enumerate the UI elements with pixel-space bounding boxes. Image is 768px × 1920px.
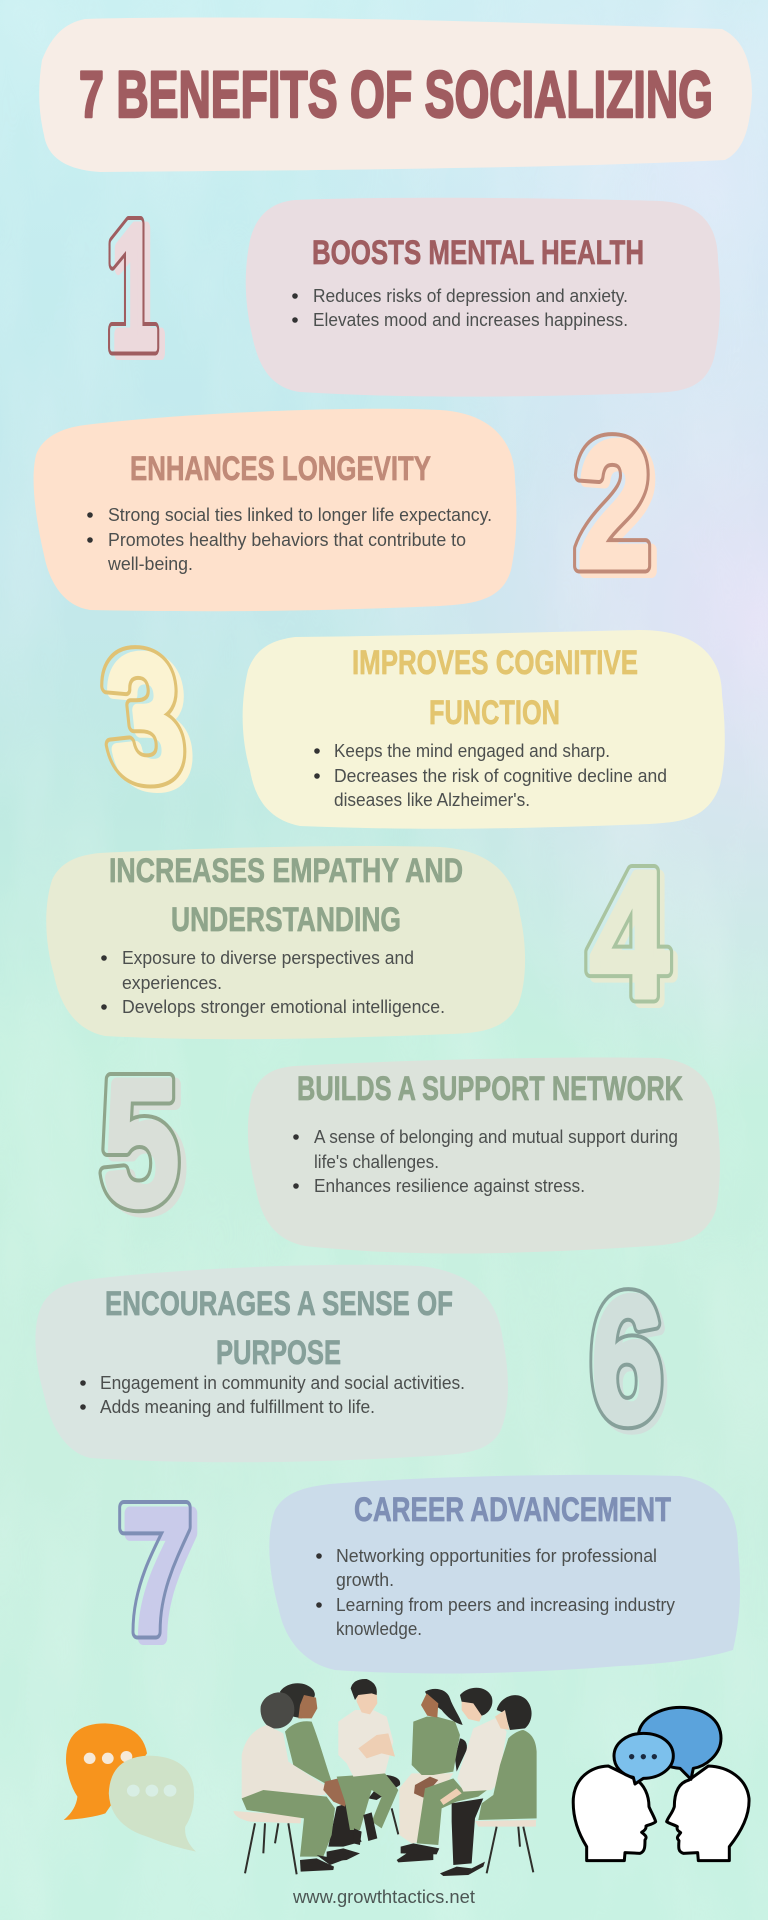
number 7: 7 bbox=[124, 1475, 198, 1677]
number 1 bbox=[108, 216, 165, 360]
title banner bbox=[39, 17, 752, 172]
number 5: 5 bbox=[106, 1046, 185, 1248]
heading bbox=[105, 1285, 453, 1372]
panel bbox=[243, 630, 725, 829]
left head bbox=[573, 1766, 656, 1861]
number 5 bbox=[98, 1072, 186, 1218]
bullets: Learning from peers and increasing industry bbox=[336, 1594, 676, 1615]
benefit 3 bbox=[243, 630, 725, 829]
panel bbox=[46, 846, 525, 1039]
bullets: well-being. bbox=[107, 553, 193, 574]
number 3 bbox=[100, 645, 192, 793]
panel bbox=[248, 1057, 720, 1254]
panel bbox=[246, 198, 720, 397]
bullets: A sense of belonging and mutual support during bbox=[314, 1126, 678, 1147]
bullets bbox=[292, 285, 628, 330]
bullets: growth. bbox=[336, 1569, 394, 1590]
large blue bubble bbox=[638, 1707, 721, 1779]
panel bbox=[34, 409, 516, 611]
bullets: Exposure to diverse perspectives and bbox=[122, 947, 414, 968]
number 7 bbox=[118, 1500, 198, 1645]
bullets bbox=[87, 504, 492, 574]
benefit 2 bbox=[34, 409, 516, 611]
bullets: life's challenges. bbox=[314, 1151, 439, 1172]
person: center man bbox=[337, 1679, 398, 1845]
bullets: Engagement in community and social activities. bbox=[100, 1372, 465, 1393]
panel bbox=[269, 1475, 740, 1673]
heading bbox=[109, 852, 463, 939]
benefit 5 bbox=[248, 1057, 720, 1254]
icon: speech bubbles orange and green bbox=[64, 1723, 196, 1852]
left chair bbox=[233, 1811, 302, 1874]
number 2: 2 bbox=[580, 408, 657, 610]
heading bbox=[352, 644, 638, 732]
benefit 6 bbox=[35, 1265, 508, 1462]
number 6: 6 bbox=[594, 1263, 667, 1465]
person: beige shirt left bbox=[242, 1692, 348, 1872]
icon: two heads with speech bubbles bbox=[573, 1707, 749, 1861]
heading: IMPROVES COGNITIVE bbox=[352, 644, 638, 682]
small blue bubble with dots bbox=[614, 1733, 673, 1784]
right head bbox=[667, 1766, 749, 1861]
bullets: Elevates mood and increases happiness. bbox=[313, 309, 628, 330]
person: green shirt left bbox=[280, 1683, 362, 1862]
bullets: Networking opportunities for professional bbox=[336, 1545, 657, 1566]
illustration: group of people sitting in a circle bbox=[233, 1679, 537, 1876]
bullets: Reduces risks of depression and anxiety. bbox=[313, 285, 628, 306]
orange bubble bbox=[64, 1723, 147, 1820]
bullets: Develops stronger emotional intelligence. bbox=[122, 996, 445, 1017]
title panel bbox=[39, 17, 752, 172]
heading: PURPOSE bbox=[216, 1334, 341, 1372]
center and back chairs bbox=[368, 1738, 467, 1834]
number 6 bbox=[589, 1287, 668, 1435]
heading: UNDERSTANDING bbox=[171, 901, 401, 939]
bullets bbox=[314, 740, 667, 810]
benefit 1 bbox=[246, 198, 720, 397]
bullets bbox=[101, 947, 445, 1017]
bullets bbox=[293, 1126, 678, 1196]
number 4: 4 bbox=[593, 838, 673, 1040]
bullets bbox=[316, 1545, 676, 1639]
person: woman in green right of center bbox=[399, 1689, 463, 1854]
person: woman in green jacket far right bbox=[440, 1695, 537, 1876]
benefit 4 bbox=[46, 846, 525, 1039]
heading: CAREER ADVANCEMENT bbox=[354, 1491, 671, 1529]
number 4 bbox=[584, 864, 678, 1008]
bullets: Strong social ties linked to longer life expectancy. bbox=[108, 504, 492, 525]
bullets: knowledge. bbox=[336, 1618, 422, 1639]
number 2 bbox=[573, 432, 657, 578]
bullets: Keeps the mind engaged and sharp. bbox=[334, 740, 610, 761]
panel bbox=[35, 1265, 508, 1462]
number 1: 1 bbox=[112, 190, 164, 392]
heading: BOOSTS MENTAL HEALTH bbox=[312, 234, 644, 272]
bullets bbox=[80, 1372, 465, 1417]
website url: www.growthtactics.net bbox=[292, 1887, 475, 1907]
number 3: 3 bbox=[100, 621, 199, 823]
benefit 7 bbox=[269, 1475, 740, 1673]
bullets: experiences. bbox=[122, 972, 222, 993]
bullets: Adds meaning and fulfillment to life. bbox=[100, 1396, 375, 1417]
green bubble bbox=[109, 1756, 196, 1852]
bullets: diseases like Alzheimer's. bbox=[334, 789, 530, 810]
heading: FUNCTION bbox=[429, 694, 560, 732]
heading: ENCOURAGES A SENSE OF bbox=[105, 1285, 453, 1323]
heading: INCREASES EMPATHY AND bbox=[109, 852, 463, 890]
right chair bbox=[475, 1820, 536, 1873]
heading: ENHANCES LONGEVITY bbox=[130, 450, 431, 488]
bullets: Enhances resilience against stress. bbox=[314, 1175, 585, 1196]
bullets: Promotes healthy behaviors that contribute to bbox=[108, 529, 466, 550]
bullets: Decreases the risk of cognitive decline and bbox=[334, 765, 667, 786]
person: man in white shirt right bbox=[397, 1688, 507, 1862]
